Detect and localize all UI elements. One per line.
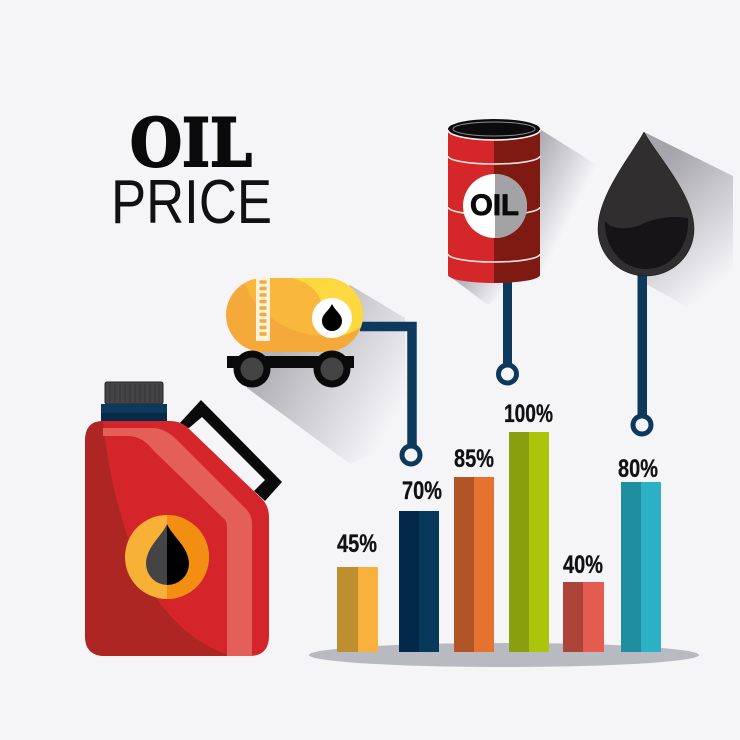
connector: tanker to 70% bar <box>360 326 420 464</box>
barrel rim <box>448 119 540 139</box>
tank body <box>226 278 363 352</box>
bar chart <box>309 400 699 667</box>
oil level in drop <box>605 217 688 269</box>
icon: tanker shadow <box>247 285 407 464</box>
icon: jerry can <box>85 382 282 656</box>
can cap <box>105 382 163 404</box>
bar: 40%: 40% <box>563 551 603 579</box>
bar: 100% <box>504 400 553 652</box>
icon: oil barrel <box>448 119 540 283</box>
barrel label text: OIL <box>470 189 519 222</box>
icon: oil drop <box>598 132 694 276</box>
ladder <box>256 278 270 341</box>
bar: 70% <box>399 477 442 652</box>
bar: 40% <box>563 551 604 652</box>
tank emblem <box>312 298 352 338</box>
icon: oil drop shadow <box>644 132 733 314</box>
wheels <box>234 350 270 388</box>
barrel bands <box>448 156 540 262</box>
chassis <box>227 356 354 368</box>
icon: barrel shadow <box>452 128 600 305</box>
icon: tanker wagon <box>226 278 363 388</box>
chart base shadow <box>309 643 699 667</box>
bar: 45%: 45% <box>337 530 377 558</box>
bar: 85%: 85% <box>454 445 494 473</box>
bar: 80%: 80% <box>618 455 658 483</box>
title: oil: OIL <box>130 104 252 182</box>
barrel label circle <box>463 174 527 238</box>
can handle <box>178 400 282 501</box>
bar: 70%: 70% <box>402 477 442 505</box>
can body <box>85 421 269 656</box>
can emblem <box>125 515 209 599</box>
connector: drop to 80% bar <box>633 272 651 434</box>
bar: 100%: 100% <box>504 400 553 428</box>
bar: 45% <box>337 530 378 652</box>
bar: 80% <box>618 455 661 652</box>
title <box>111 104 272 237</box>
can collar <box>101 404 167 422</box>
title: price: PRICE <box>111 168 272 237</box>
connector: barrel to 100% bar <box>498 280 516 383</box>
bar: 85% <box>454 445 494 652</box>
